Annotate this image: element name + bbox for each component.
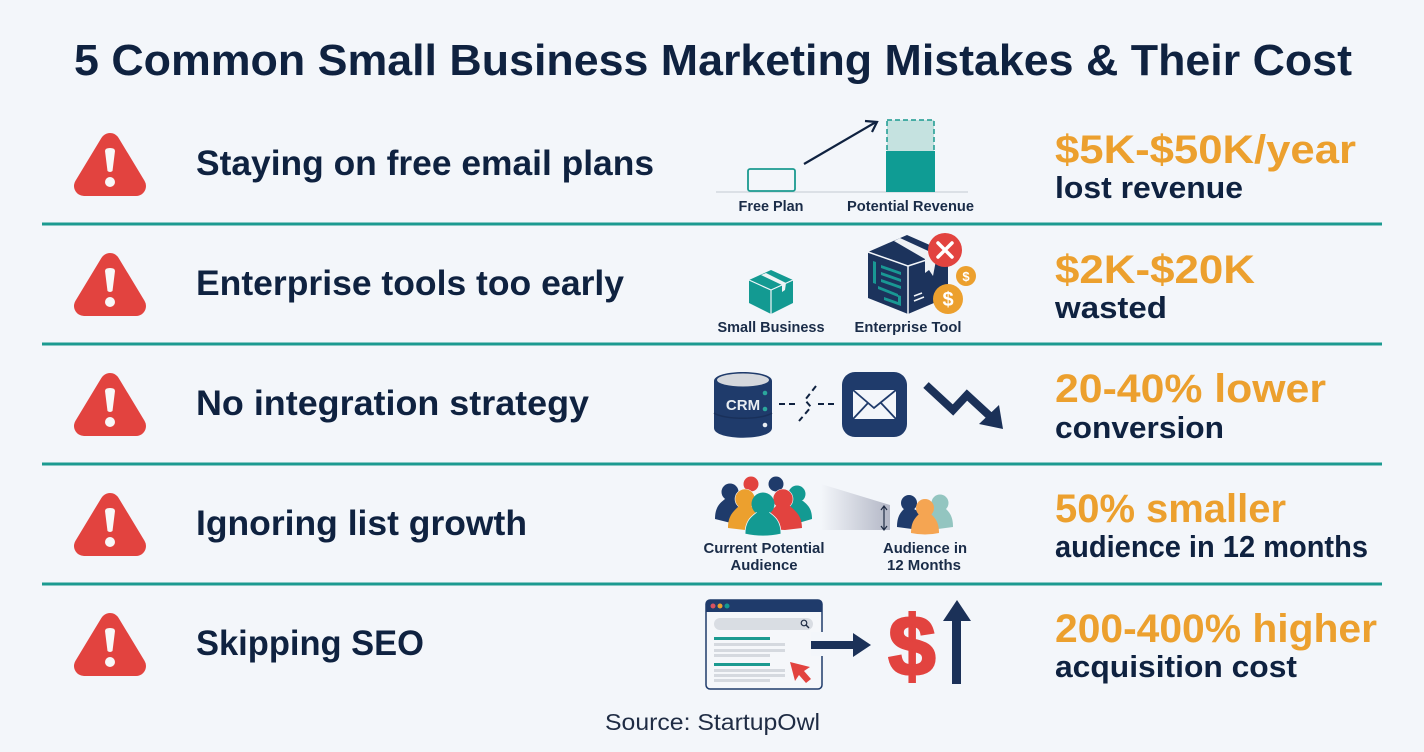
callout: cost 2 — [1054, 248, 1255, 325]
callout: cost 4: 50% smaller — [1055, 487, 1286, 531]
icon: enterprise tool box with cost — [854, 233, 976, 336]
chart: free plan versus potential revenue: Potential Revenue — [847, 198, 974, 215]
icon: shrinking funnel — [821, 484, 890, 530]
icon: red dollar sign: $ — [889, 599, 935, 693]
callout: cost 1: lost revenue — [1055, 170, 1243, 205]
callout: cost 1 — [1055, 128, 1356, 205]
icon: CRM database: CRM — [726, 397, 760, 414]
callout: cost 1: $5K-$50K/year — [1055, 128, 1356, 172]
callout: cost 3: conversion — [1055, 410, 1224, 445]
callout: cost 2: wasted — [1054, 290, 1167, 325]
icon: declining arrow — [926, 385, 1003, 429]
chart: free plan versus potential revenue — [716, 120, 974, 215]
panel: row 1 free email plans — [84, 120, 1356, 215]
icon: small business box: Small Business — [718, 319, 824, 336]
heading: mistake 2: Enterprise tools too early — [196, 264, 625, 303]
icon: CRM database — [714, 372, 772, 438]
callout: cost 3: 20-40% lower — [1055, 367, 1326, 411]
icon: warning triangle — [84, 383, 136, 427]
icon: future audience: 12 Months — [887, 557, 961, 574]
icon: warning triangle — [84, 263, 136, 307]
callout: cost 3 — [1055, 367, 1326, 445]
chart: free plan versus potential revenue: Free Plan — [738, 198, 804, 215]
heading: mistake 1: Staying on free email plans — [196, 144, 654, 183]
icon: future audience — [883, 494, 967, 574]
callout: cost 5: acquisition cost — [1055, 649, 1297, 684]
arrow: up — [943, 600, 971, 684]
callout: cost 4: audience in 12 months — [1055, 529, 1368, 564]
icon: future audience: Audience in — [883, 540, 967, 557]
icon: warning triangle — [84, 503, 136, 547]
icon: warning triangle — [84, 143, 136, 187]
heading: mistake 3: No integration strategy — [196, 384, 590, 423]
icon: current audience crowd — [704, 476, 824, 574]
icon: current audience crowd: Audience — [730, 557, 798, 574]
icon: broken connection — [779, 386, 837, 421]
panel: row 3 integration strategy — [84, 367, 1326, 445]
icon: enterprise tool box with cost: $ — [962, 269, 970, 284]
arrow: right — [811, 633, 871, 657]
heading: mistake 5: Skipping SEO — [196, 624, 424, 663]
icon: current audience crowd: Current Potential — [704, 540, 824, 557]
icon: email envelope — [842, 372, 907, 437]
panel: row 2 enterprise tools — [84, 233, 1255, 336]
panel: row 4 list growth — [84, 476, 1368, 574]
panel: row 5 skipping SEO — [84, 599, 1377, 693]
source note: Source: StartupOwl — [605, 709, 820, 735]
callout: cost 2: $2K-$20K — [1055, 248, 1255, 292]
icon: small business box — [718, 270, 824, 336]
icon: enterprise tool box with cost: $ — [942, 289, 954, 311]
callout: cost 4 — [1055, 487, 1368, 564]
callout: cost 5 — [1055, 607, 1377, 684]
heading: mistake 4: Ignoring list growth — [196, 504, 527, 543]
title: 5 Common Small Business Marketing Mistakes & Their Cost — [74, 36, 1352, 85]
callout: cost 5: 200-400% higher — [1055, 607, 1377, 651]
icon: search results browser — [706, 600, 824, 689]
icon: enterprise tool box with cost: Enterprise Tool — [854, 319, 962, 336]
icon: warning triangle — [84, 623, 136, 667]
